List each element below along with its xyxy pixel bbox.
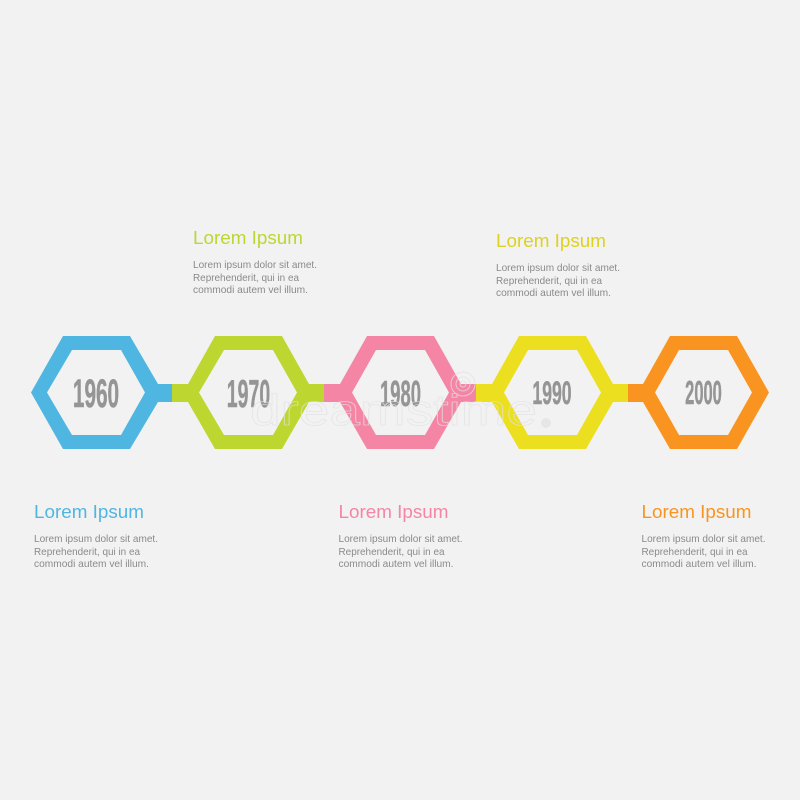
step 4: yellow hexagon 1990 <box>476 336 628 449</box>
text block: pink: Reprehenderit, qui in ea <box>338 547 445 558</box>
text block: orange: commodi autem vel illum. <box>642 559 756 570</box>
text block: pink <box>338 501 462 570</box>
watermark: dreamstime <box>250 386 537 435</box>
step 1: blue hexagon 1960 <box>31 336 172 449</box>
text block: pink: Lorem ipsum dolor sit amet. <box>338 534 462 545</box>
text block: pink: Lorem Ipsum <box>338 501 448 522</box>
year label 1980: 1980 <box>380 375 421 415</box>
text block: yellow: Lorem Ipsum <box>496 230 606 251</box>
year label 1970: 1970 <box>227 372 270 416</box>
step 3: pink hexagon 1980 <box>324 336 476 449</box>
text block: blue: commodi autem vel illum. <box>34 559 149 570</box>
text block: blue: Lorem ipsum dolor sit amet. <box>34 534 158 545</box>
text block: blue: Lorem Ipsum <box>34 501 144 522</box>
text block: green: Lorem Ipsum <box>193 227 303 248</box>
year label 1990: 1990 <box>532 377 572 411</box>
text block: orange <box>642 501 766 570</box>
text block: blue <box>34 501 158 570</box>
step 5: orange hexagon 2000 <box>628 336 769 449</box>
text block: green: Reprehenderit, qui in ea <box>193 273 299 284</box>
year label 2000: 2000 <box>685 374 722 412</box>
text block: green <box>193 227 317 296</box>
text block: blue: Reprehenderit, qui in ea <box>34 547 140 558</box>
text block: orange: Lorem ipsum dolor sit amet. <box>642 534 766 545</box>
text block: green: Lorem ipsum dolor sit amet. <box>193 260 317 271</box>
text block: yellow: Lorem ipsum dolor sit amet. <box>496 263 620 274</box>
step 2: green hexagon 1970 <box>172 336 324 449</box>
text block: yellow <box>496 230 620 299</box>
watermark <box>250 372 551 435</box>
text block: yellow: commodi autem vel illum. <box>496 288 611 299</box>
text block: orange: Lorem Ipsum <box>642 501 752 522</box>
text block: pink: commodi autem vel illum. <box>338 559 454 570</box>
year label 1960: 1960 <box>73 371 119 416</box>
text block: green: commodi autem vel illum. <box>193 285 308 296</box>
text block: orange: Reprehenderit, qui in ea <box>642 547 748 558</box>
text block: yellow: Reprehenderit, qui in ea <box>496 276 602 287</box>
